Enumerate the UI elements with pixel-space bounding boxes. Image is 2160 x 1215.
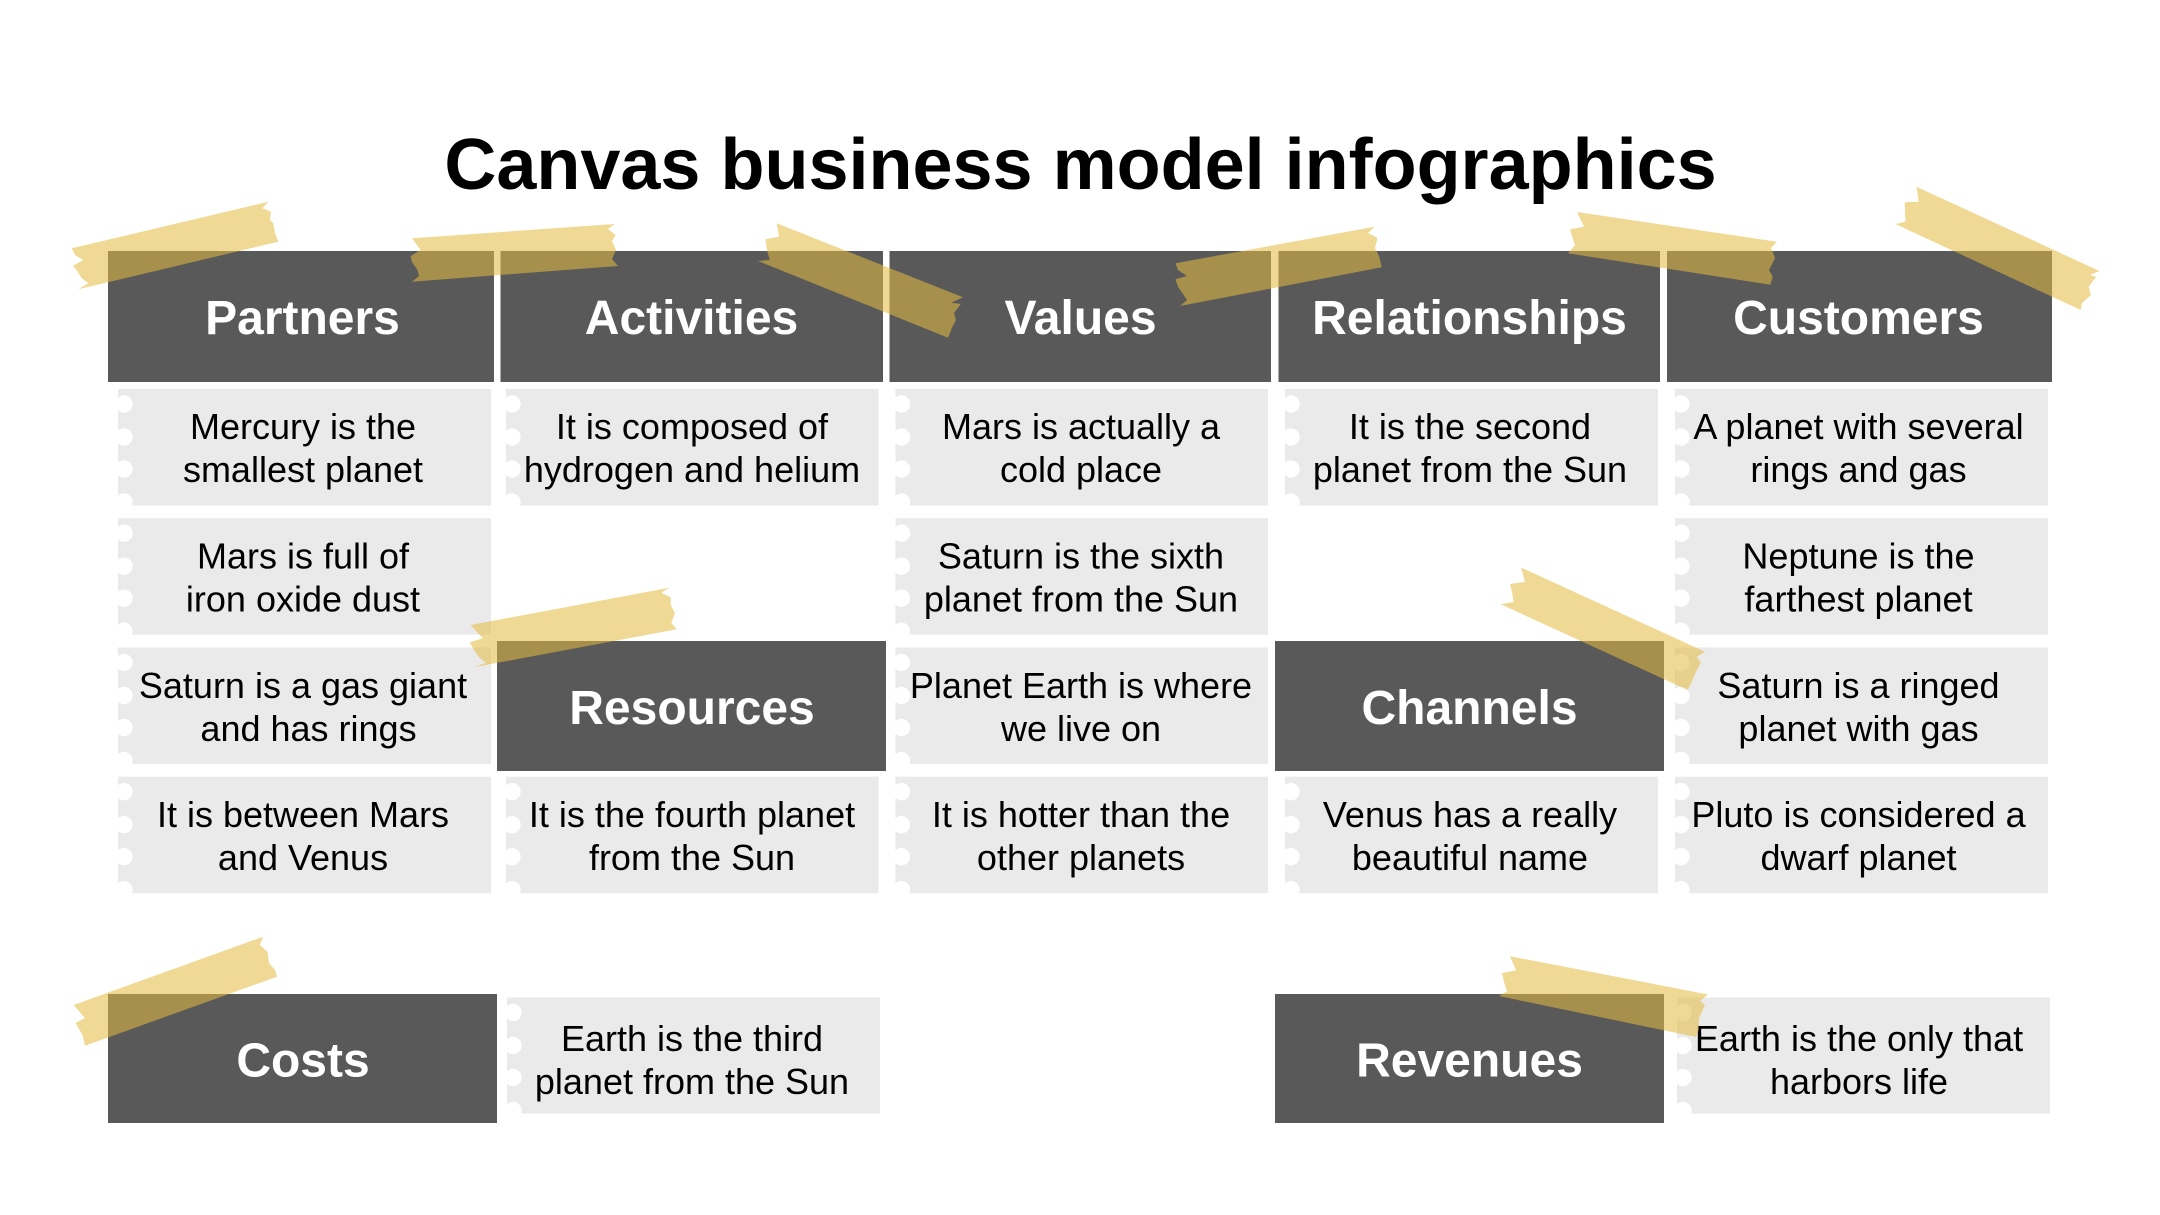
card: Mars cold: Mars is actually a	[942, 406, 1221, 447]
card: Saturn sixth: Saturn is the sixth	[938, 536, 1224, 576]
card: Saturn: and has rings	[200, 708, 417, 749]
card: Pluto	[1672, 777, 2048, 898]
panel: channels block	[1275, 641, 1664, 898]
card: Neptune: farthest planet	[1744, 578, 1973, 620]
tape: Channels	[1501, 568, 1705, 690]
card: hydrogen and helium	[503, 389, 878, 511]
card: Venus: beautiful name	[1352, 837, 1588, 878]
card: Saturn ringed: Saturn is a ringed	[1717, 665, 2000, 706]
card: between Mars and Venus: and Venus	[218, 837, 388, 878]
card: fourth planet	[503, 777, 878, 898]
heading: Partners	[108, 251, 494, 382]
heading: Channels	[1275, 641, 1664, 771]
panel: relationships column	[1278, 251, 1660, 511]
card: rings and gas	[1672, 389, 2048, 511]
card: Mars	[115, 518, 491, 640]
card: Earth harbors life: harbors life	[1770, 1061, 1948, 1102]
card: fourth planet: It is the fourth planet	[529, 794, 855, 835]
card: second planet: It is the second	[1349, 406, 1591, 447]
heading: Values	[890, 251, 1271, 382]
card: Saturn ringed: planet with gas	[1738, 708, 1979, 749]
tape: Revenues	[1499, 956, 1708, 1037]
card: Neptune: Neptune is the	[1742, 536, 1975, 576]
card: Mars: iron oxide dust	[186, 578, 420, 620]
card: Earth: Planet Earth is where	[910, 665, 1252, 706]
card: hydrogen and helium: It is composed of	[556, 406, 829, 447]
card: Mars cold	[893, 389, 1268, 511]
card: hotter: other planets	[977, 837, 1185, 878]
card: Mercury: smallest planet	[183, 449, 423, 490]
panel: revenues block	[1275, 994, 2050, 1123]
card: Saturn	[115, 648, 491, 769]
panel: partners column	[108, 251, 494, 898]
card: Earth	[893, 648, 1268, 769]
heading: Activities	[500, 251, 883, 382]
card: Mercury	[115, 389, 491, 511]
panel: values column	[890, 251, 1271, 898]
tape: Resources	[470, 588, 677, 667]
heading: Revenues	[1275, 994, 1664, 1123]
card: Saturn sixth: planet from the Sun	[924, 578, 1238, 620]
card: Earth harbors life	[1674, 998, 2050, 1119]
card: second planet	[1282, 389, 1658, 511]
card: hotter: It is hotter than the	[932, 794, 1230, 835]
tape: Activities and Values	[758, 223, 963, 338]
card: between Mars and Venus: It is between Mars	[157, 794, 449, 835]
card: hotter	[893, 777, 1268, 898]
card: hydrogen and helium: hydrogen and helium	[524, 449, 860, 490]
heading: Resources: Resources	[569, 682, 815, 735]
card: Earth third: Earth is the third	[561, 1018, 823, 1059]
heading: Partners: Partners	[205, 292, 400, 345]
card: between Mars and Venus	[115, 777, 491, 898]
card: second planet: planet from the Sun	[1313, 449, 1627, 490]
card: Mars: Mars is full of	[197, 536, 410, 576]
heading: Customers: Customers	[1733, 292, 1984, 345]
tape: Customers	[1895, 187, 2100, 310]
heading: Relationships: Relationships	[1312, 292, 1627, 345]
panel: customers column	[1667, 251, 2052, 898]
card: rings and gas: rings and gas	[1750, 449, 1967, 490]
card: Venus	[1282, 777, 1658, 898]
heading: Resources	[497, 641, 886, 771]
card: Saturn: Saturn is a gas giant	[139, 665, 467, 706]
card: Earth third: planet from the Sun	[535, 1061, 849, 1102]
card: Saturn sixth	[893, 518, 1268, 640]
tape: Partners	[72, 202, 278, 289]
card: Earth third	[504, 998, 880, 1119]
card: Neptune	[1672, 518, 2048, 640]
card: rings and gas: A planet with several	[1693, 406, 2024, 447]
card: Mercury: Mercury is the	[190, 406, 416, 447]
heading: Customers	[1667, 251, 2052, 382]
card: Earth harbors life: Earth is the only that	[1695, 1018, 2023, 1059]
heading: Channels: Channels	[1361, 682, 1578, 735]
panel: resources block	[497, 641, 886, 898]
heading: Activities: Activities	[585, 292, 798, 345]
tape: Relationships and Customers	[1568, 212, 1777, 285]
panel: costs block	[108, 994, 880, 1123]
heading: Revenues: Revenues	[1356, 1034, 1583, 1088]
tape: Costs	[74, 937, 277, 1046]
heading: Values: Values	[1004, 292, 1157, 345]
card: Pluto: dwarf planet	[1760, 837, 1957, 878]
panel: activities column	[500, 251, 883, 511]
tape: Values and Relationships	[1175, 227, 1382, 306]
card: Mars cold: cold place	[1000, 449, 1162, 490]
card: Saturn ringed	[1672, 648, 2048, 769]
heading: Costs: Costs	[236, 1034, 370, 1088]
tape: Partners and Activities	[411, 224, 618, 282]
card: fourth planet: from the Sun	[589, 837, 795, 878]
card: Pluto: Pluto is considered a	[1691, 794, 2027, 835]
card: Earth: we live on	[1000, 708, 1161, 749]
heading: Relationships	[1278, 251, 1660, 382]
title: Canvas business model infographics	[444, 125, 1717, 205]
card: Venus: Venus has a really	[1323, 794, 1617, 835]
heading: Costs	[108, 994, 497, 1123]
